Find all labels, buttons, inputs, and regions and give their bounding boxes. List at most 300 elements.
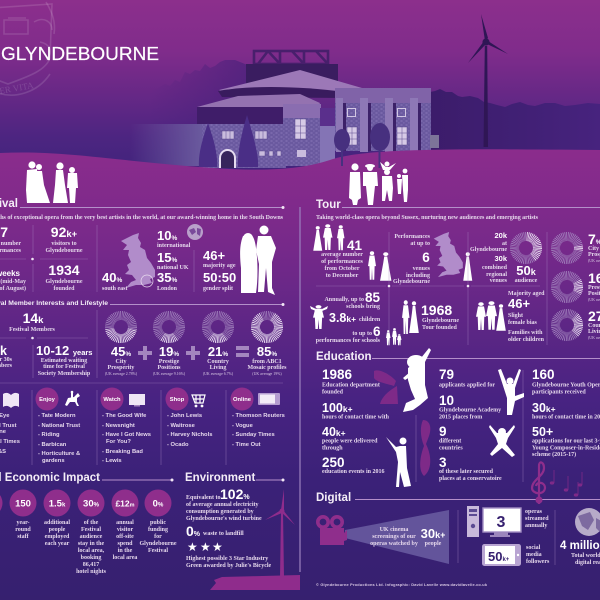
stat: 41: average number xyxy=(321,252,363,258)
stat: 7 xyxy=(588,231,600,263)
stat: cinema xyxy=(370,526,445,547)
arched door xyxy=(219,149,236,168)
heading rule xyxy=(355,496,600,504)
stat: electricity: Glyndebourne's wind turbine xyxy=(186,516,262,522)
cypress trees xyxy=(199,123,217,167)
stat: operas streamed xyxy=(525,509,549,529)
stat: 100k: 100k+ xyxy=(322,401,353,415)
icon: monitor with 3 xyxy=(483,508,521,537)
globe xyxy=(187,224,203,240)
stat: landfill: 0% xyxy=(186,523,201,539)
heading: Digital xyxy=(316,492,351,504)
stat: schools: children xyxy=(359,317,381,323)
stat: staff: 150 xyxy=(15,498,31,510)
stat: visitors xyxy=(45,224,83,254)
roof band xyxy=(218,87,345,98)
stat: 1986: 1986 xyxy=(322,367,353,382)
stat: funding: public xyxy=(150,520,166,526)
column dividers xyxy=(32,390,226,465)
stat: audience split xyxy=(470,231,508,284)
stat: 160 xyxy=(532,367,600,396)
stat: staff: year- xyxy=(16,520,30,526)
stat: cinema: people xyxy=(425,541,442,547)
stat: green award: Green awarded by Julie's Bicycle xyxy=(186,563,272,569)
list: shop: - John Lewis xyxy=(167,413,202,419)
stat: 7: City xyxy=(588,246,599,252)
stat: waiting time: time for Festival xyxy=(43,364,85,370)
stat: 1986: Education department xyxy=(322,382,380,388)
stat: founded: 1934 xyxy=(48,262,80,278)
list: online xyxy=(232,413,285,448)
icon: cart xyxy=(192,395,205,407)
stat: stay: 30% xyxy=(83,498,100,510)
stat: social: social xyxy=(526,545,541,551)
stat: 50k: audience xyxy=(515,278,538,284)
stat: jobs: people xyxy=(49,527,66,533)
stat: schools: 3.8k+ xyxy=(329,311,356,325)
icon: monitor with 3: 3 xyxy=(497,514,506,531)
stat: 50+: scheme (2015-17) xyxy=(532,451,576,458)
stat: cinema: screenings of our xyxy=(372,534,416,540)
stat: 85: (UK average 19%) xyxy=(252,372,282,376)
list: online: - Vogue xyxy=(232,423,254,429)
stat: landfill xyxy=(186,523,244,539)
title: GLYNDEBOURNE xyxy=(1,43,159,64)
enjoy tag xyxy=(36,388,58,410)
panel: economic impact xyxy=(0,472,177,575)
stat: electricity: consumption generated by xyxy=(186,509,254,515)
stat: jobs: employed xyxy=(45,534,70,540)
donut: country living xyxy=(206,316,230,338)
stat: national xyxy=(157,250,189,271)
stat: age: majority age xyxy=(203,263,236,269)
list: shop xyxy=(167,413,212,448)
heading: Education xyxy=(316,351,372,363)
stat: audience split: at xyxy=(502,241,507,247)
stat: london: 35% xyxy=(157,270,177,285)
heading rule xyxy=(20,206,284,209)
list: enjoy xyxy=(38,413,80,464)
stat: 85: from ABC1 xyxy=(252,359,282,365)
stat: members: Festival Members xyxy=(9,327,56,333)
stat: age: 50:50 xyxy=(203,270,236,285)
stat: 46+: Majority aged xyxy=(508,291,545,297)
panel: digital xyxy=(316,492,600,566)
stat: 3: places at a conservatoire xyxy=(439,476,502,482)
stat: 9: 9 xyxy=(439,424,447,439)
stat: stay: stay in the xyxy=(78,541,104,547)
stat: electricity: Equivalent to xyxy=(186,495,221,501)
stat: stay: booking xyxy=(81,555,101,561)
stat: 10: Glyndebourne Academy xyxy=(439,408,501,414)
heading rule xyxy=(342,206,600,208)
icon: tablet xyxy=(258,393,280,405)
list: enjoy: - National Trust xyxy=(38,423,80,429)
stat: cinema: operas watched by xyxy=(370,541,418,547)
list: watch: - The Good Wife xyxy=(102,413,147,419)
lawn trees xyxy=(334,123,390,168)
stat: 1968: Tour founded xyxy=(422,325,458,331)
stat: venues: venues xyxy=(413,266,431,272)
stat: audience split: Glyndebourne xyxy=(470,247,507,253)
stat: international xyxy=(157,228,191,249)
stat: 79: 79 xyxy=(439,367,454,382)
sky background xyxy=(0,0,600,170)
stat: venues: including xyxy=(406,273,430,279)
stat: 46+ xyxy=(508,291,545,343)
fly tower block xyxy=(246,64,338,92)
figures: tour family xyxy=(349,162,408,205)
stat: 100k xyxy=(322,401,390,420)
stat: funding: Glyndebourne xyxy=(139,541,177,547)
stat: 19 xyxy=(153,344,186,376)
watch tag: Watch xyxy=(103,397,121,403)
stat: performances xyxy=(0,224,22,254)
stat: social: media xyxy=(526,552,542,558)
stat: international: 10% xyxy=(157,228,177,243)
stat: audience split: regional xyxy=(486,272,507,278)
figure: jumping girl xyxy=(403,348,431,412)
stat: stay: local area, xyxy=(78,548,105,554)
stat: 9: different xyxy=(439,438,461,444)
uk map xyxy=(434,232,463,277)
panel: member interests xyxy=(0,300,287,465)
stat: cinema: UK cinema xyxy=(380,527,408,533)
heading: Tour xyxy=(316,199,341,211)
stat: founded xyxy=(45,262,83,292)
stat: spend: off-site xyxy=(116,534,134,540)
main column divider xyxy=(299,207,301,572)
list: watch: - Lewis xyxy=(102,458,122,464)
stat: 3: of these later secured xyxy=(439,469,494,475)
online tag xyxy=(230,388,254,410)
stat: 19: Positions xyxy=(157,365,181,371)
lawn background xyxy=(0,149,600,600)
stat: digital reach xyxy=(560,540,600,566)
stat: spend: spend xyxy=(117,541,133,547)
stat: venues xyxy=(393,234,431,285)
donut: prestige positions xyxy=(158,316,180,338)
plus xyxy=(138,346,152,360)
plus xyxy=(186,346,200,360)
stat: landfill: waste to landfill xyxy=(203,531,244,537)
list: enjoy: gardens xyxy=(42,458,65,464)
stat: 46+: female bias xyxy=(508,320,537,326)
stat: schools: 85 xyxy=(365,290,381,305)
stat: audience split: 20k xyxy=(494,231,508,240)
stat: 41: of performances xyxy=(321,259,364,265)
opera house building xyxy=(130,51,439,168)
donut: city prosperity xyxy=(556,236,578,260)
circle: london xyxy=(141,275,153,287)
stat: 1986: founded xyxy=(322,390,344,396)
stat: jobs: additional xyxy=(44,520,70,526)
stat: schools: schools bring xyxy=(346,304,380,310)
stat: 41: from October xyxy=(324,266,360,272)
stat: members xyxy=(9,310,56,333)
stat: 19: Prestige xyxy=(159,359,180,365)
stat: waiting time: 10-12 years xyxy=(36,343,92,358)
stat: 10 xyxy=(439,393,501,420)
stat: under 30s xyxy=(0,344,13,369)
stat: 30k: 30k+ xyxy=(532,401,556,415)
icon: phone with 50k: 50k+ xyxy=(488,549,510,564)
list: watch xyxy=(102,413,151,464)
stat: waiting time xyxy=(36,343,92,377)
list: enjoy: - Barbican xyxy=(38,442,67,448)
list: online: - Time Out xyxy=(232,442,261,448)
panel: environment xyxy=(185,472,300,590)
stat: 85: 85% xyxy=(257,344,277,359)
stat: 40k: through xyxy=(322,446,343,452)
stars: ★ xyxy=(187,540,198,554)
stat: venues: at up to xyxy=(410,241,430,247)
stat: spend: visitor xyxy=(117,527,133,533)
dividers xyxy=(316,232,547,345)
fly tower lattice xyxy=(254,51,328,64)
dividers xyxy=(0,310,283,383)
stat: jobs: 1.5k xyxy=(49,498,66,510)
stat: founded: founded xyxy=(53,286,75,292)
stat: 9 xyxy=(439,424,463,452)
stat: jobs xyxy=(44,490,70,547)
stone wall xyxy=(200,124,286,168)
figures: raised arms xyxy=(310,305,328,329)
stat: venues: Performances xyxy=(394,234,431,240)
stat: london xyxy=(157,270,178,292)
stat: electricity: 102% xyxy=(220,486,250,502)
stat: 250 xyxy=(322,455,385,475)
figure: singer xyxy=(463,252,472,281)
stat: 45 xyxy=(105,344,138,376)
dividers xyxy=(458,510,555,565)
stat: south east: south east xyxy=(102,286,128,292)
stat: 27 xyxy=(588,308,600,340)
heading rule xyxy=(102,478,174,482)
icon: phone with 50k xyxy=(482,544,521,566)
stat: 85: Mosaic profiles xyxy=(247,365,287,371)
shop tag: Shop xyxy=(170,397,185,403)
stat: 40k xyxy=(322,425,378,452)
donut: mosaic total xyxy=(256,316,278,338)
stat: 46+: older children xyxy=(508,337,545,343)
heading rule xyxy=(110,303,284,306)
stat: 50+ xyxy=(532,425,600,458)
panel: tour xyxy=(310,162,600,345)
right block xyxy=(335,95,431,151)
stat: spend: annual xyxy=(116,520,134,526)
list: read xyxy=(0,413,20,455)
donut: audience xyxy=(514,236,538,260)
left block xyxy=(283,104,321,166)
stat: 16 xyxy=(588,270,600,302)
stat: 1968 xyxy=(421,302,459,331)
figure: conductor xyxy=(386,437,411,487)
icon: horse rider xyxy=(65,391,80,406)
stat: operas streamed: annually xyxy=(525,523,547,529)
stat: international: international xyxy=(157,243,191,249)
stat: 46+: 46+ xyxy=(508,296,530,311)
stat: 50k xyxy=(515,263,538,284)
stat: spend: in the xyxy=(118,548,133,554)
icon: cinema camera xyxy=(318,517,347,545)
stat: 10: 10 xyxy=(439,393,454,408)
stat: operas streamed: operas xyxy=(525,509,543,515)
dark band xyxy=(197,107,283,124)
stat: 250: education events in 2016 xyxy=(322,469,385,475)
stat: social xyxy=(526,545,550,565)
stat: age: 46+ xyxy=(203,248,225,263)
panel: education xyxy=(316,348,600,504)
stat: stay: hotel nights xyxy=(76,569,107,575)
stat: funding: for xyxy=(154,534,162,540)
stat: 21 xyxy=(203,344,234,376)
stat: 100k: hours of contact time with xyxy=(322,414,390,420)
stat: green award xyxy=(186,556,272,569)
stat: 45: City xyxy=(116,359,126,365)
list: enjoy: - Horticulture & xyxy=(38,451,80,457)
stat: audience split: venues xyxy=(490,278,508,284)
forest right xyxy=(428,89,600,150)
stat: audience split: combined xyxy=(482,265,508,271)
magenta instruments xyxy=(374,370,430,476)
stat: 41: 41 xyxy=(347,238,363,253)
stat: 1986 xyxy=(322,367,380,396)
stat: south east xyxy=(102,270,128,292)
stat: schools: to up to xyxy=(352,331,372,337)
stat: waiting time: Society Membership xyxy=(38,371,91,377)
stat: 3: 3 xyxy=(439,455,447,470)
intro: Taking world-class opera beyond Sussex, nurturing new audiences and emerging artists xyxy=(316,215,539,221)
stat: funding: Festival xyxy=(148,548,168,554)
stat: 19: 19% xyxy=(159,344,179,359)
stat: 46+: Families with xyxy=(508,330,543,336)
stat: 21: Country xyxy=(207,359,229,365)
stat: funding: funding xyxy=(148,527,168,533)
list: enjoy: - Tate Modern xyxy=(38,413,76,419)
globe xyxy=(575,508,600,536)
stat: funding: 0% xyxy=(153,498,164,510)
stat: spend: £12m xyxy=(115,498,135,508)
stars: ★ xyxy=(212,540,223,554)
crest xyxy=(0,2,55,96)
figures: couple silhouette xyxy=(240,226,276,295)
enjoy tag: Enjoy xyxy=(39,397,56,403)
forest left xyxy=(150,60,260,125)
heading rule xyxy=(256,478,284,482)
stat: stay: audience xyxy=(80,534,103,540)
stat: stay: 86,417 xyxy=(83,562,99,568)
list: shop: - Waitrose xyxy=(167,423,196,429)
stat: 50k: 50k xyxy=(516,263,537,278)
magenta turbine and ground xyxy=(210,489,300,590)
stat: age: gender split xyxy=(203,286,233,292)
figures: children xyxy=(386,328,402,345)
stat: schools: Annually, up to xyxy=(324,297,364,303)
stat: venues: Glyndebourne xyxy=(393,279,430,285)
pavement xyxy=(130,124,202,166)
list: watch: - Have I Got News xyxy=(102,432,151,438)
panel: festival xyxy=(0,161,284,295)
list: watch: - Newsnight xyxy=(102,423,135,429)
online tag: Online xyxy=(233,397,252,403)
figures: trio xyxy=(313,224,344,251)
stat: london: London xyxy=(157,286,178,292)
stat: 160: 160 xyxy=(532,367,555,382)
list: online: - Thomson Reuters xyxy=(232,413,285,419)
partial circle xyxy=(0,490,2,516)
list: online: - Sunday Times xyxy=(232,432,275,438)
stat: 30k xyxy=(532,401,600,420)
stat: staff: staff xyxy=(17,534,30,540)
stat: stay: of the xyxy=(84,520,99,526)
footer credit: © Glyndebourne Productions Ltd. Infographic: David Lavelle www.davidlavelle.co.uk xyxy=(316,582,488,587)
stat: operas streamed: streamed xyxy=(525,516,549,522)
list: watch: For You? xyxy=(106,439,131,445)
stat: stay xyxy=(76,490,107,575)
heading: Environment xyxy=(185,472,255,484)
stat: south east: 40% xyxy=(102,270,122,285)
stat: 21: (UK average 6.7%) xyxy=(203,372,234,376)
stat: 250: 250 xyxy=(322,455,345,470)
wind turbine xyxy=(468,14,508,147)
stat: 40k: people were delivered xyxy=(322,438,378,444)
stat: green award: Highest possible 3 Star Industry xyxy=(186,556,268,562)
stat: founded: Glyndebourne xyxy=(45,279,83,285)
stat: visitors: visitors to xyxy=(51,241,77,247)
figures: family xyxy=(476,301,506,331)
magenta treble clef and notes xyxy=(532,462,582,504)
figure: star jump xyxy=(489,425,515,457)
divider xyxy=(416,370,523,482)
stat: jobs: each year xyxy=(45,541,70,547)
stat: 19: (UK average 9.16%) xyxy=(153,372,186,376)
stat: venues: 6 xyxy=(422,250,430,265)
list: enjoy: - Riding xyxy=(38,432,60,438)
watch tag xyxy=(100,388,124,410)
list: watch: - Breaking Bad xyxy=(102,449,143,455)
stat: stay: Festival xyxy=(81,527,101,533)
donut: city prosperity xyxy=(110,316,132,338)
stat: 45: (UK average 2.78%) xyxy=(105,372,138,376)
stat: spend xyxy=(112,490,138,561)
heading rule xyxy=(372,358,600,360)
stars: ★ xyxy=(200,540,211,554)
stat: 45: 45% xyxy=(111,344,131,359)
stat: schools xyxy=(316,290,381,344)
stat: social: followers xyxy=(526,559,550,565)
shop tag xyxy=(166,388,188,410)
stat: 21: 21% xyxy=(208,344,228,359)
stat: 3 xyxy=(439,455,502,482)
stat: funding xyxy=(139,490,177,554)
windows xyxy=(222,131,281,156)
stat: electricity: of average annual electricity xyxy=(186,502,258,508)
stat: visitors: 92k+ xyxy=(51,224,78,240)
stat: spend: local area xyxy=(113,555,137,561)
icon: book xyxy=(3,393,19,408)
list: shop: - Harvey Nichols xyxy=(167,432,212,438)
stars xyxy=(187,540,223,554)
stat: schools: 6 xyxy=(373,324,381,339)
figures: pair xyxy=(402,300,419,334)
stat: weeks: (mid-May xyxy=(0,278,26,285)
stat: age xyxy=(203,248,236,292)
link block xyxy=(320,108,335,126)
list: shop: - Ocado xyxy=(167,442,189,448)
stat: 1968: Glyndebourne xyxy=(422,318,459,324)
stat: schools: performances for schools xyxy=(316,338,381,344)
